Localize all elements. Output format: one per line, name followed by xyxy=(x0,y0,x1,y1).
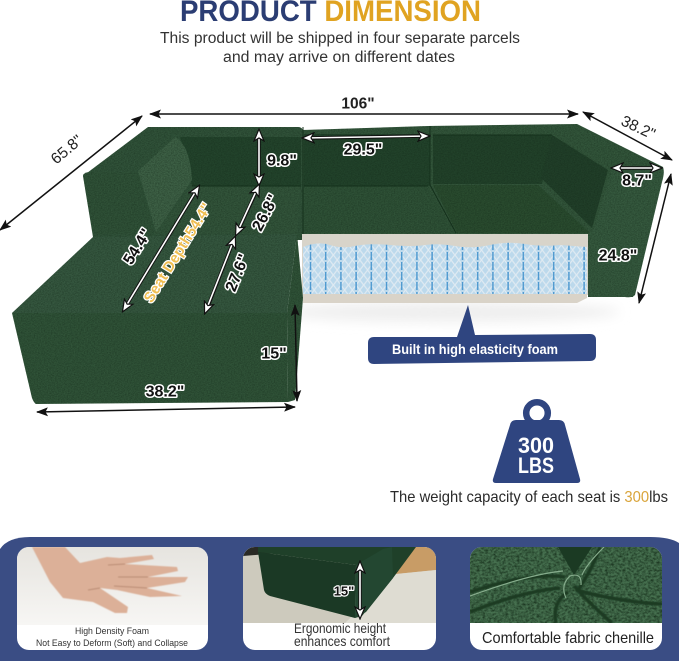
subtitle: and may arrive on different dates xyxy=(223,49,455,66)
dimension labels: 26.8" xyxy=(249,192,283,234)
dimension labels: Seat Depth54.4" xyxy=(141,200,215,306)
callout: foam xyxy=(368,305,596,364)
panel: left back section xyxy=(83,127,303,240)
icon: weight: 300 xyxy=(518,433,554,458)
subtitle: This product will be shipped in four separate parcels xyxy=(160,30,520,47)
dimension labels: 15" xyxy=(261,346,287,362)
card: fabric: Comfortable fabric chenille xyxy=(482,630,654,647)
dimension arrows: white xyxy=(123,130,661,313)
arrow xyxy=(358,566,362,612)
dimension arrows: black xyxy=(0,112,672,412)
panel: bottom band xyxy=(0,537,679,661)
dimension labels: 27.6" xyxy=(223,252,253,294)
dimension labels: 106" xyxy=(341,96,375,112)
dimension labels: 65.8" xyxy=(48,132,86,168)
card: height: Ergonomic height xyxy=(294,620,386,636)
seat separators xyxy=(192,126,552,234)
card: height xyxy=(243,547,436,650)
dimension labels: 54.4" xyxy=(121,226,155,268)
callout: foam: Built in high elasticity foam xyxy=(392,341,558,357)
card: fabric xyxy=(470,547,662,650)
left armrest side xyxy=(138,137,192,232)
card: foam: Not Easy to Deform (Soft) and Collapse xyxy=(36,638,188,649)
floor shadow xyxy=(280,302,620,322)
hand illustration xyxy=(32,547,188,613)
dimension labels: 38.2" xyxy=(618,113,658,143)
card: height: enhances comfort xyxy=(294,633,390,649)
dimension labels: 24.8" xyxy=(599,248,637,264)
weight capacity text: The weight capacity of each seat is 300lbs xyxy=(390,489,668,506)
dimension labels: 38.2" xyxy=(146,384,184,400)
icon: weight xyxy=(493,402,580,483)
icon: weight: LBS xyxy=(518,453,554,478)
dimension labels: 9.8" xyxy=(267,152,297,170)
subtitle xyxy=(160,30,520,66)
dimension labels: 29.5" xyxy=(344,142,382,158)
card: foam xyxy=(17,547,208,650)
chaise xyxy=(12,234,303,404)
card: height: 15" xyxy=(334,584,354,598)
sofa xyxy=(12,124,664,404)
panel: main back and right arm xyxy=(303,124,664,297)
dimension labels xyxy=(48,96,658,400)
card: foam: High Density Foam xyxy=(75,626,149,637)
left armrest front xyxy=(83,172,155,234)
dimension labels: 8.7" xyxy=(622,172,652,190)
foam cutaway xyxy=(302,234,588,303)
